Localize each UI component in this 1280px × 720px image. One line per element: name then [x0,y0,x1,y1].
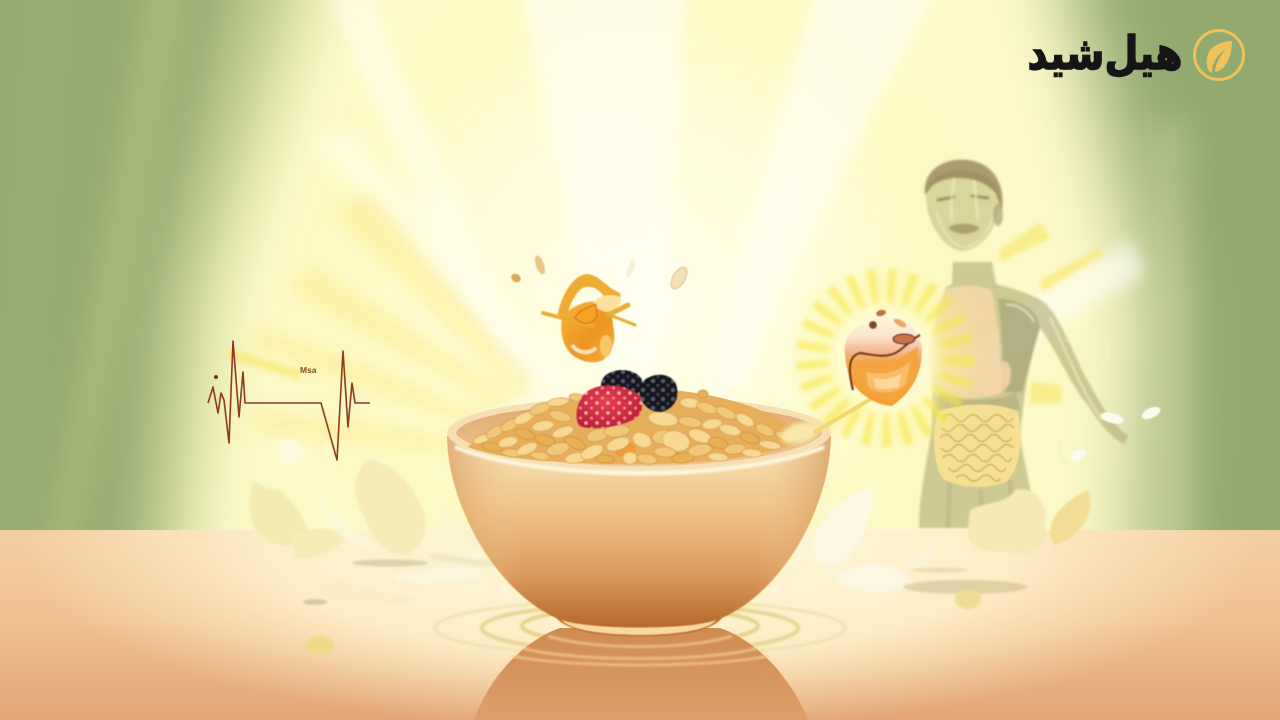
human anatomy figure [919,160,1128,528]
raspberry [577,385,642,428]
brand logo [1028,26,1244,80]
ripples on table [435,600,845,656]
blackberry right [639,375,677,412]
flakes left [250,440,495,656]
figure body [919,262,1128,528]
honey heart [510,254,690,362]
bowl rim [447,397,831,476]
glowing digestive organ [845,309,922,406]
yellow streaks by figure [226,222,1104,404]
oats mound [468,388,806,464]
blackberry left [601,370,643,398]
background wall [0,0,1280,530]
oatmeal bowl [447,388,831,636]
table surface [0,530,1280,720]
green side panels [0,0,1280,530]
oats flakes [472,390,794,466]
arm glow lines and flakes near figure [1060,340,1162,478]
ECG label: Msa [300,365,317,375]
heart shape [543,274,635,362]
oat bits around heart [510,254,690,291]
logo leaf icon [1194,30,1244,80]
spoon bowl with cream [778,418,822,448]
figure head [925,160,1003,251]
light rays [226,0,1145,455]
figure intestines [934,404,1021,487]
burst rays [813,286,957,430]
central glow [412,78,865,419]
ECG heartbeat line [208,341,370,460]
bowl foot highlight [562,620,716,635]
rim highlight [455,447,824,473]
bowl body [447,436,831,636]
flakes right [814,486,1090,609]
honey spoon handle [815,389,889,432]
bowl reflection [474,628,808,720]
pale streaks on green [0,0,1195,560]
figure chest peach [929,286,1001,399]
berries [577,370,677,428]
logo wordmark: هیل‌شید [1028,26,1182,80]
sunburst behind organ [805,278,965,438]
